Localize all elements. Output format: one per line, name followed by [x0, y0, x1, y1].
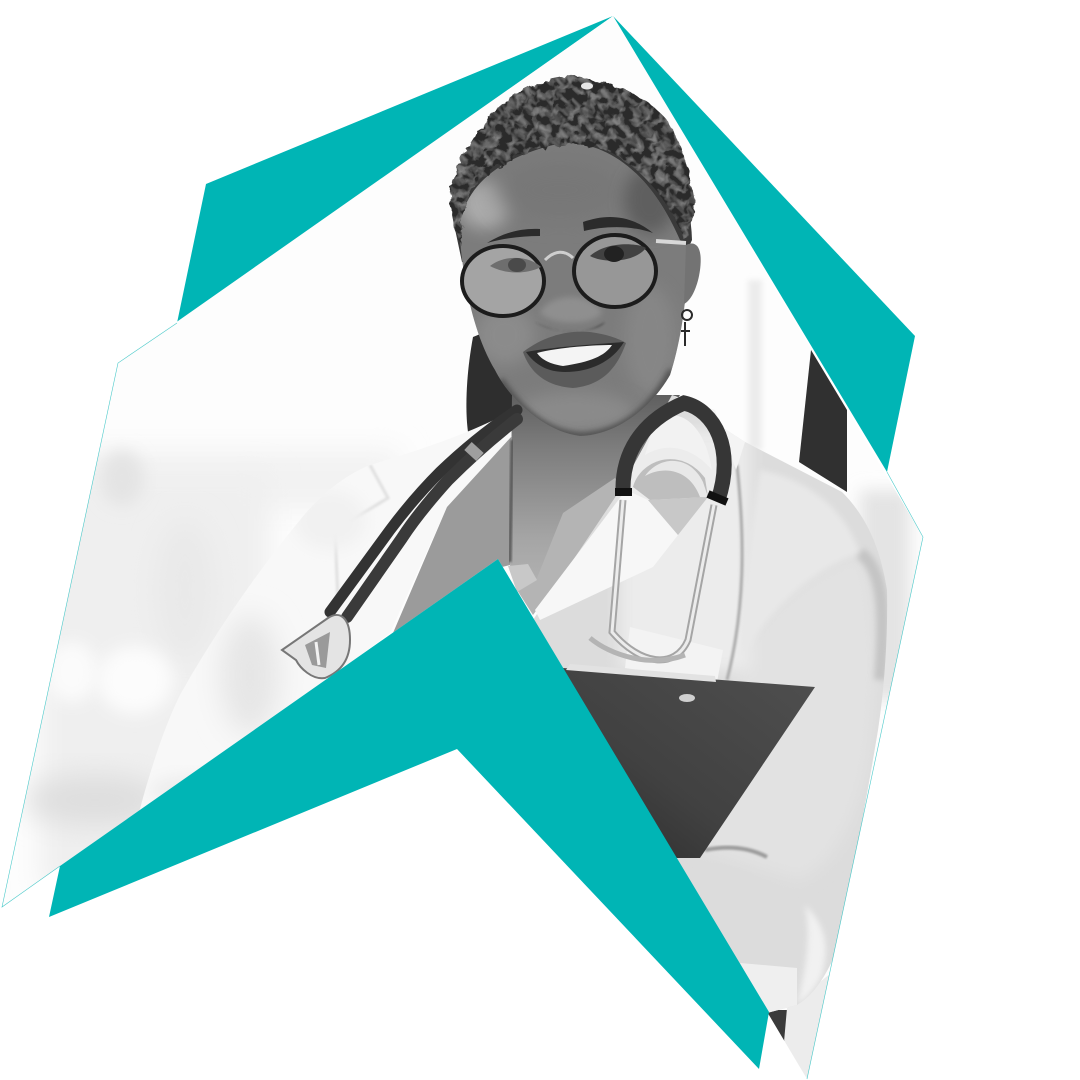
glasses: left lens [462, 246, 544, 316]
stethoscope: tube band [468, 446, 480, 457]
face: nose [540, 297, 602, 322]
earring [681, 310, 692, 346]
teal shape: top left [177, 16, 613, 323]
lower dark bar [768, 1010, 787, 1041]
stethoscope [282, 403, 727, 678]
face: cheek shading [475, 314, 533, 366]
stethoscope: connectors [615, 492, 727, 502]
braid [466, 334, 512, 432]
lab coat: right collar [633, 459, 708, 500]
stethoscope: left tube upper [330, 410, 517, 612]
photo edge: thin teal outline [2, 323, 923, 1079]
teeth [537, 345, 612, 366]
face: forehead highlight [459, 181, 511, 229]
lower background sliver [784, 975, 829, 1078]
undershirt [508, 564, 537, 592]
clipboard clip [679, 694, 695, 702]
glasses: temple [656, 241, 686, 243]
stethoscope: right tube [623, 403, 724, 500]
mouth interior [526, 342, 624, 372]
hair [450, 76, 695, 245]
glasses: bridge [545, 252, 573, 260]
hair backing [452, 144, 692, 262]
glasses [462, 235, 686, 316]
eyebrows [487, 217, 653, 243]
lab coat: shoulder near collar [672, 395, 745, 470]
clipboard [563, 668, 815, 858]
stethoscope: left tube lower [347, 419, 517, 617]
window frame dark bar [799, 350, 847, 492]
neck [510, 395, 680, 578]
lab coat: right lapel [535, 490, 678, 620]
stethoscope: chest piece [282, 615, 350, 678]
glasses: eyes [490, 258, 541, 273]
hair: hair tie highlight [581, 82, 593, 90]
scrubs: left panel [390, 436, 512, 640]
lab coat: right side [534, 395, 887, 1012]
lab coat: cuff [740, 963, 797, 1013]
lips [523, 332, 626, 388]
scrubs: shadow seam [510, 440, 512, 562]
scrubs: right panel [517, 478, 625, 615]
clipboard paper edge [566, 664, 716, 682]
ear [684, 243, 701, 304]
lab coat: left side [140, 420, 492, 810]
teal shape: top right [613, 16, 915, 472]
stethoscope: silver tubes [612, 500, 714, 660]
photo background: blurred window [25, 280, 910, 890]
teal shape: bottom arrow [49, 559, 769, 1069]
glasses: right lens [574, 235, 656, 307]
face and head [459, 142, 687, 436]
lab coat: pocket [625, 627, 723, 682]
